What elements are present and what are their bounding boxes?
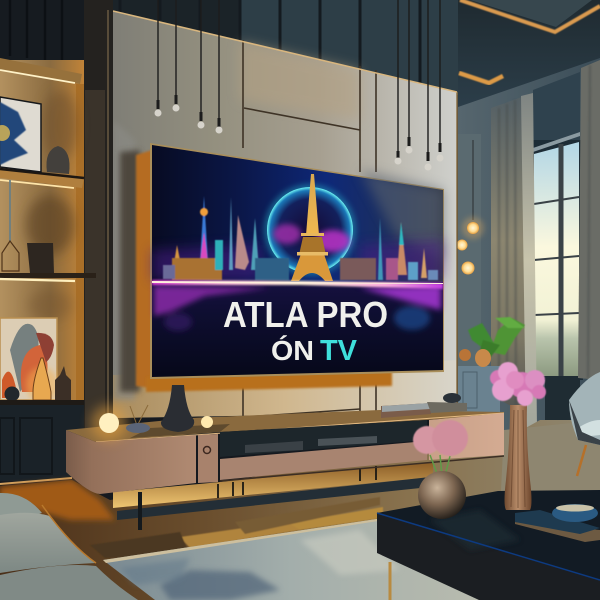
panel: side wall hanging lamps [456, 134, 484, 368]
open media niche [220, 420, 427, 457]
panel: TV backlight glow [136, 150, 392, 392]
under-cabinet light strip [113, 462, 433, 508]
nebula floor [154, 286, 441, 331]
panel: window [533, 132, 583, 426]
panel: TV stand [66, 410, 504, 530]
screen upper gradient [152, 145, 443, 282]
abstract art [0, 318, 57, 400]
panel: armchair [569, 372, 600, 476]
glowing horizon line [152, 280, 443, 289]
bottle [55, 366, 71, 400]
wall panel seams [243, 40, 376, 418]
media boxes [245, 441, 303, 453]
panel: side plant and cabinet [458, 317, 525, 412]
panel: book and bowl on table [515, 504, 600, 542]
Eiffel tower [291, 174, 333, 281]
panel: concrete feature wall [113, 11, 457, 418]
city skyline [163, 196, 438, 280]
panel: stand decor [91, 385, 467, 441]
plant leaves [468, 317, 525, 358]
dark frame on shelf [27, 243, 54, 273]
black vase [161, 385, 194, 432]
panel: rug [103, 519, 479, 600]
panel: left column [0, 0, 113, 440]
ON wordmark: ÓN [271, 335, 314, 366]
left door [66, 430, 196, 494]
TV wall shadow [120, 150, 140, 392]
panel: ceiling and side wall [458, 0, 600, 450]
drawer [220, 441, 427, 480]
glowing orb lamp [91, 405, 127, 441]
panel: pendant lights over wall [154, 0, 444, 170]
table side [377, 513, 600, 600]
ATLA PRO wordmark: ATLA PRO [223, 294, 388, 335]
screen title text [223, 294, 388, 367]
panel: coffee table [377, 490, 600, 600]
left towers [163, 196, 289, 280]
panel: round vase with pink flowers [413, 420, 468, 519]
floor planks [90, 497, 383, 558]
panel: lower left cabinet [0, 400, 84, 484]
right towers [340, 218, 438, 280]
vase on shelf [46, 146, 70, 174]
panel: shelving unit [0, 58, 96, 405]
panel: floor [0, 420, 600, 600]
small light [201, 416, 213, 428]
stand top surface [66, 410, 504, 442]
ball ornament [4, 386, 20, 402]
third shelf [0, 273, 96, 278]
table top [377, 490, 600, 580]
panel: tall vase with pink flowers [490, 362, 546, 510]
second shelf [0, 168, 84, 188]
panel: dark slat wall above [85, 0, 458, 95]
right door [429, 413, 504, 460]
lantern [26, 358, 58, 403]
stacked books [381, 393, 467, 418]
panel: TV screen [150, 143, 444, 379]
reed holder [126, 405, 150, 433]
panel: curtains [491, 60, 600, 428]
art: feather print [0, 97, 41, 172]
globe [264, 184, 356, 276]
screen lower area [152, 282, 443, 377]
geometric house ornament [2, 180, 19, 271]
small door with knob [198, 434, 218, 483]
screen bezel [150, 143, 444, 379]
stand leg [138, 492, 142, 530]
ceiling light coves [459, 0, 600, 83]
top shelf [0, 58, 82, 84]
panel: sofa [0, 493, 138, 600]
TV wordmark: TV [320, 335, 358, 367]
